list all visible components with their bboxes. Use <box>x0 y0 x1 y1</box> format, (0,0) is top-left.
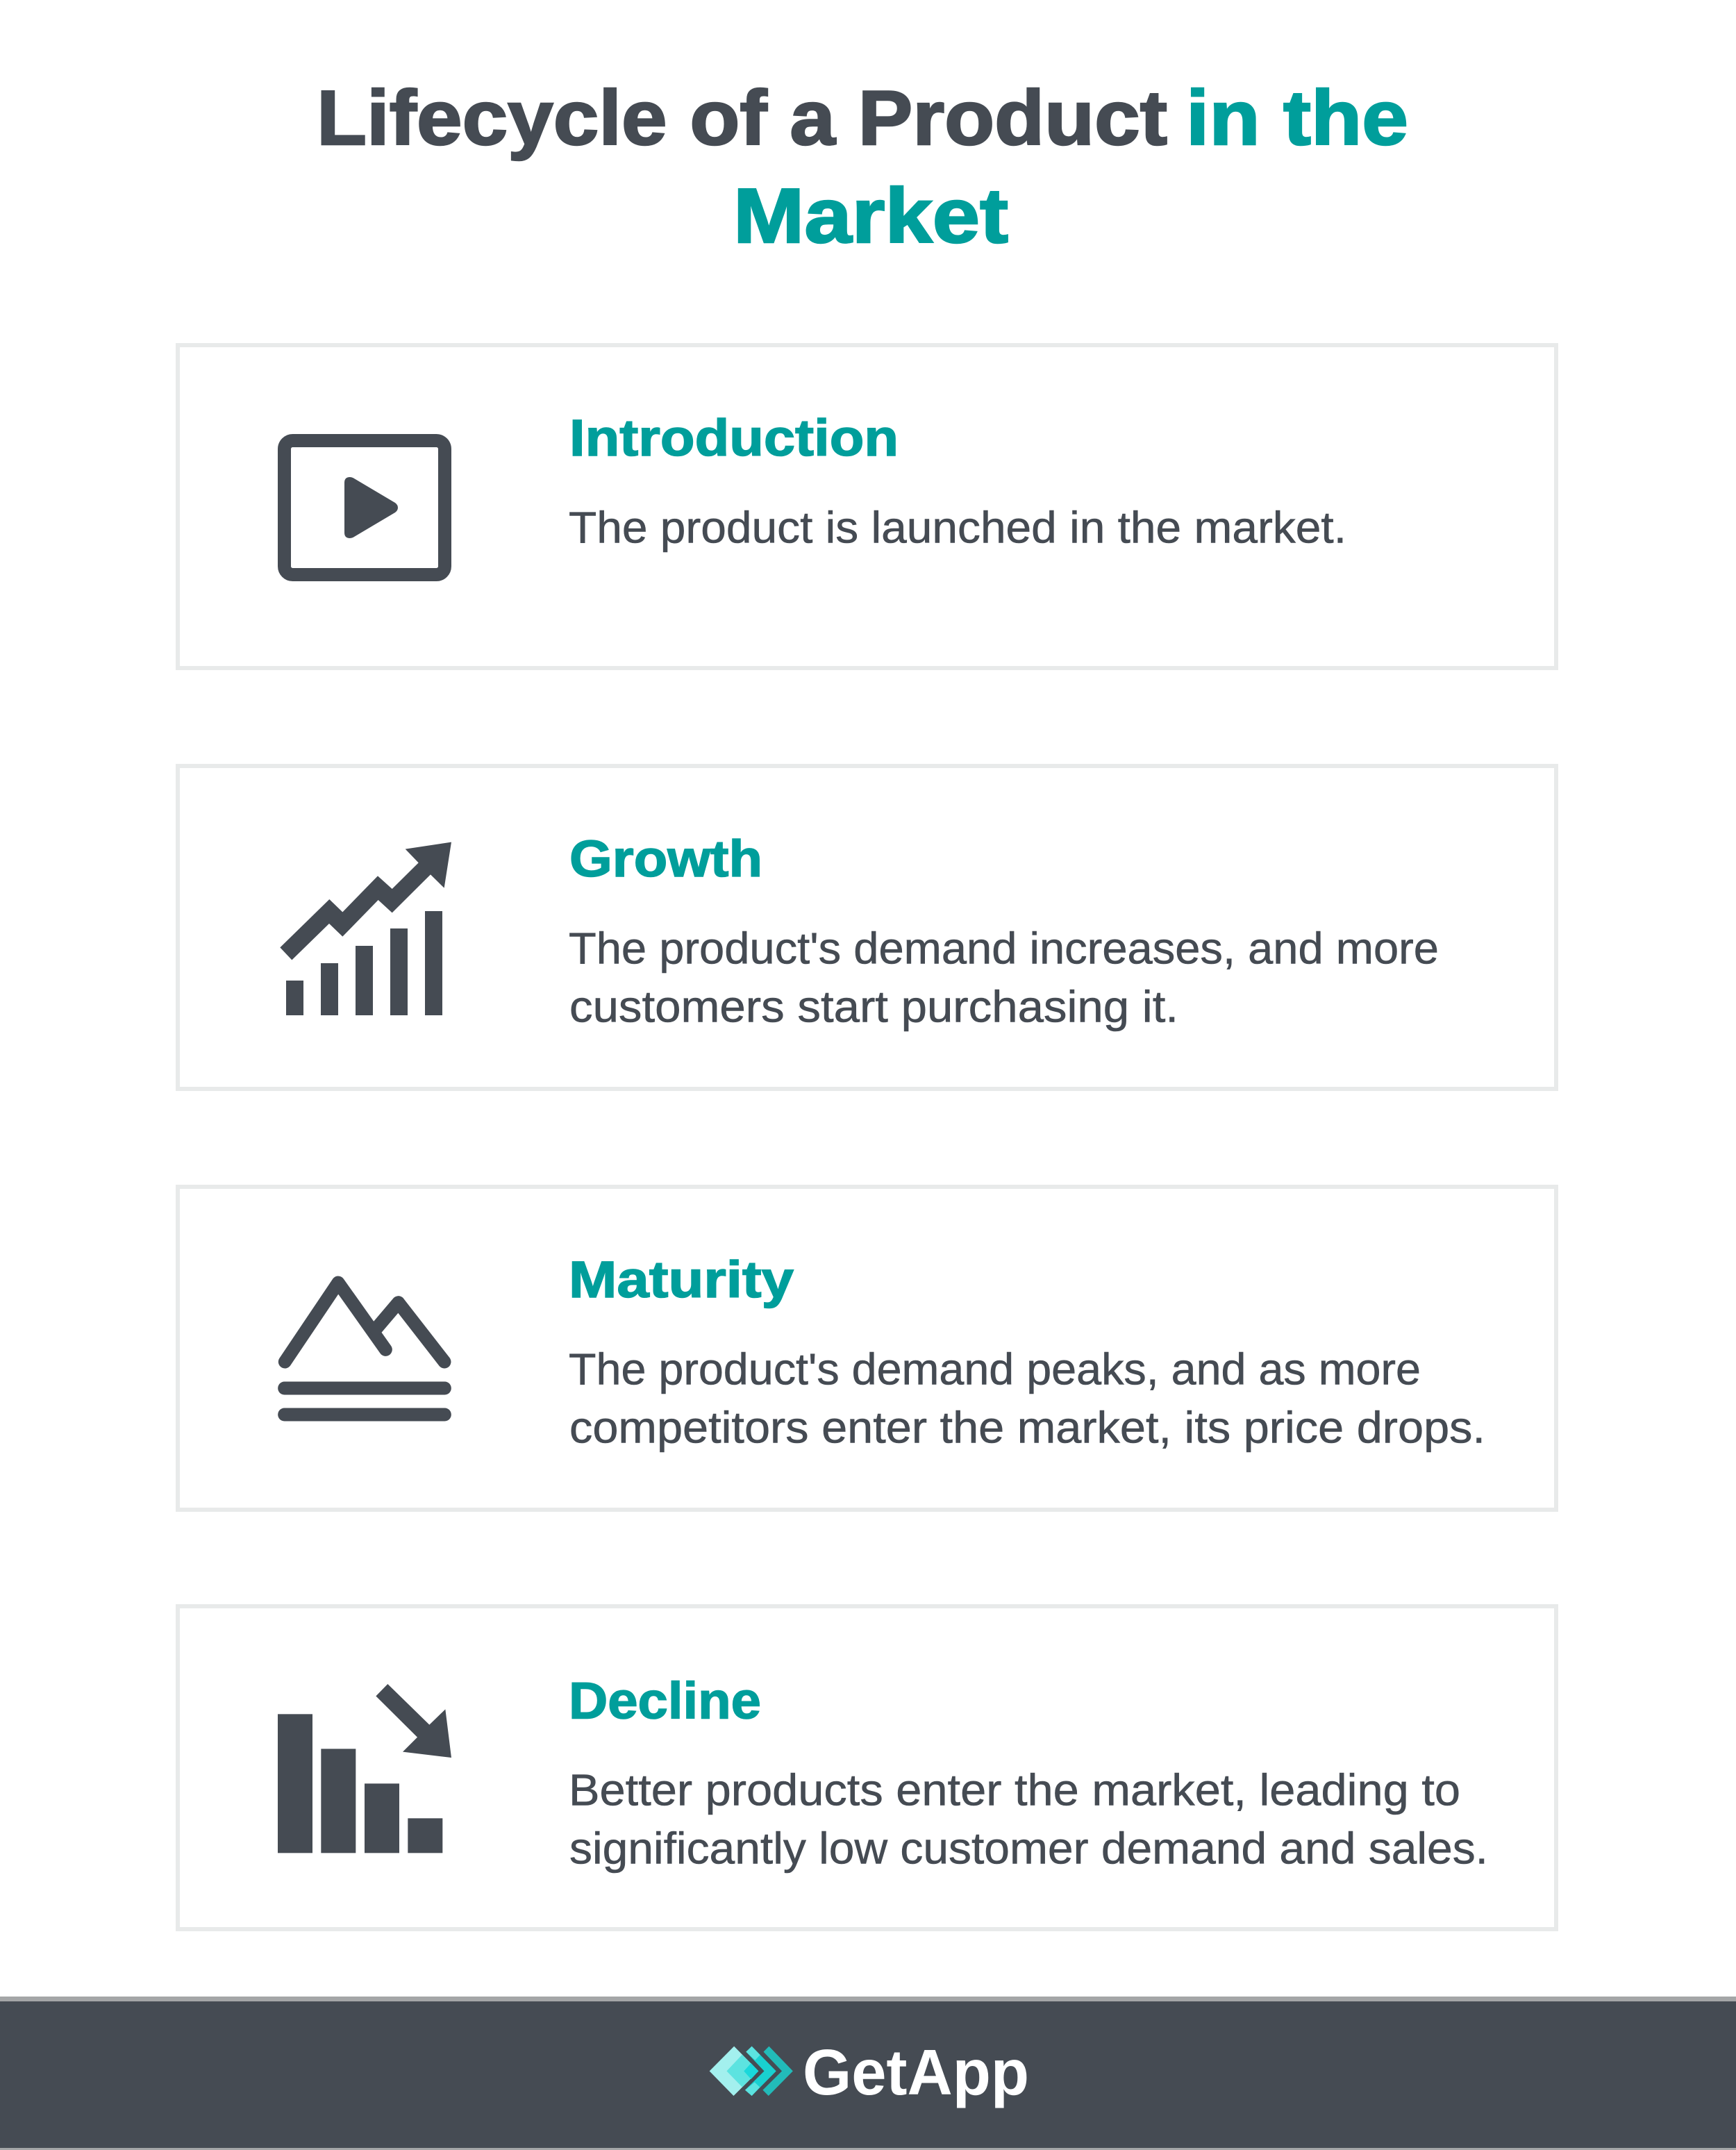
icon: GetApp logo mark <box>710 2047 793 2096</box>
text: maturity description <box>569 1344 1485 1453</box>
icon: rising chart <box>280 842 451 1015</box>
text: decline description: Better products enter the market, leading to <box>569 1765 1460 1815</box>
text: decline description <box>569 1765 1488 1874</box>
text: maturity description: The product's demand peaks, and as more <box>569 1344 1421 1394</box>
logo wordmark: GetApp <box>803 2036 1029 2108</box>
title: Market <box>733 173 1008 259</box>
text: maturity description: competitors enter the market, its price drops. <box>569 1403 1485 1453</box>
text: growth description: The product's demand increases, and more <box>569 924 1439 974</box>
title <box>317 75 1408 259</box>
footer band <box>0 1997 1736 2150</box>
panel: introduction <box>178 345 1556 668</box>
text: introduction description: The product is launched in the market. <box>569 503 1346 553</box>
panel: maturity <box>178 1187 1556 1510</box>
heading: maturity: Maturity <box>569 1251 794 1308</box>
heading: introduction: Introduction <box>569 409 899 467</box>
heading: growth: Growth <box>569 830 762 888</box>
heading: decline: Decline <box>569 1672 761 1729</box>
text: decline description: significantly low customer demand and sales. <box>569 1824 1488 1874</box>
panel: growth <box>178 766 1556 1089</box>
panel: decline <box>178 1606 1556 1929</box>
text: growth description: customers start purchasing it. <box>569 982 1178 1032</box>
icon: play screen <box>285 440 444 575</box>
title: Lifecycle of a Product <box>317 75 1167 161</box>
icon: falling chart <box>278 1684 451 1853</box>
title: in the <box>1186 75 1408 161</box>
icon: mountains <box>285 1283 444 1415</box>
text: growth description <box>569 924 1439 1032</box>
